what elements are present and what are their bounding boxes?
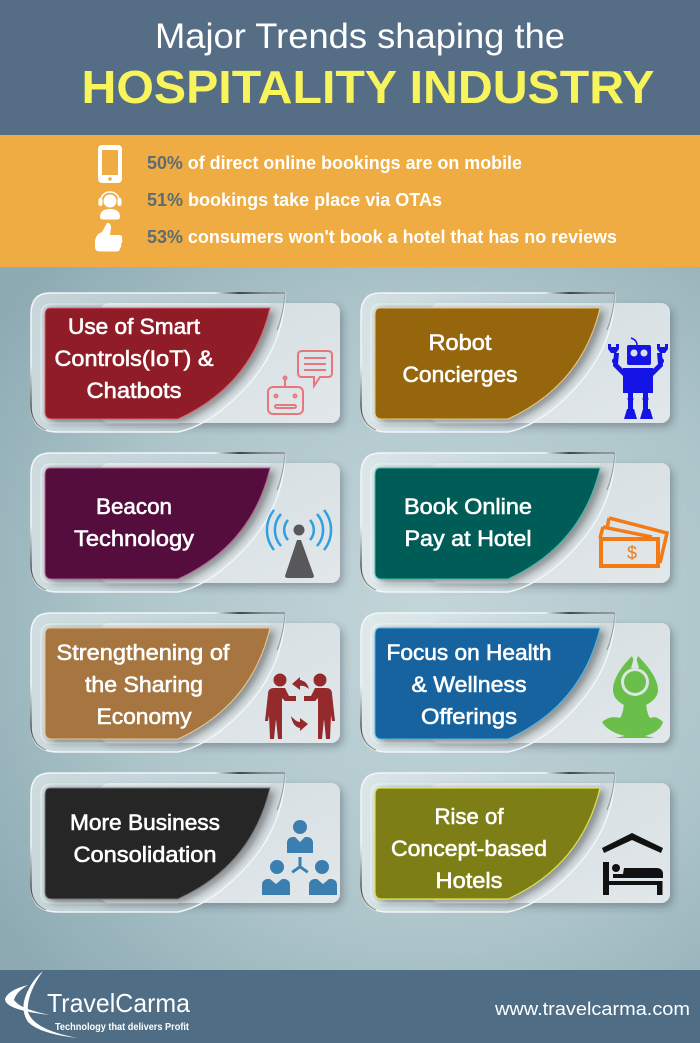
icon: sharing [265,674,335,739]
icon: robot [608,338,668,419]
label: Strengthening of [56,640,230,665]
card: smart controls [31,293,340,432]
title line 1: Major Trends shaping the [155,17,565,56]
label [391,804,547,893]
icon: thumbs up [95,223,122,252]
label [404,494,532,551]
label: Rise of [434,804,504,829]
card: business consolidation [31,773,340,912]
icon: yoga [602,654,663,738]
card: book online [361,453,670,592]
icon: beacon [267,510,331,578]
label [70,810,220,867]
icon: chatbot [268,351,332,414]
label: Offerings [421,704,517,729]
icon: cash: $ [627,543,637,563]
label [74,494,194,551]
label: Beacon [96,494,172,519]
label: & Wellness [412,672,526,697]
card: robot concierges [361,293,670,432]
icon: headset agent [98,192,122,220]
website: www.travelcarma.com [494,999,690,1019]
card: concept hotels [361,773,670,912]
label [54,314,214,403]
label: Economy [96,704,192,729]
label: Robot [428,330,492,355]
label: Consolidation [74,842,216,867]
label: Book Online [404,494,532,519]
icon: mobile phone [98,145,122,183]
label: Use of Smart [68,314,200,339]
logo: wordmark: TravelCarma [47,988,191,1018]
label: Concierges [402,362,518,387]
title line 2: HOSPITALITY INDUSTRY [82,61,654,113]
card: sharing economy [31,613,340,752]
page background [0,267,700,970]
footer band [0,970,700,1043]
label: Controls(IoT) & [54,346,214,371]
label [402,330,518,387]
stat 3: 53% consumers won't book a hotel that has no reviews [147,227,617,247]
label: the Sharing [85,672,203,697]
icon: team [262,820,337,895]
label: Focus on Health [386,640,552,665]
label: Concept-based [391,836,547,861]
logo: tagline: Technology that delivers Profit [55,1022,190,1033]
label: Technology [74,526,194,551]
logo: swoosh [5,971,78,1038]
label: Pay at Hotel [404,526,532,551]
header band [0,0,700,135]
card: health and wellness [361,613,670,752]
icon: cash [600,518,667,566]
card: beacon technology [31,453,340,592]
label: More Business [70,810,220,835]
icon: hotel bed [602,833,663,895]
stats band [0,135,700,267]
label: Chatbots [86,378,182,403]
label: Hotels [436,868,502,893]
label [386,640,552,729]
stat 1: 50% of direct online bookings are on mobile [147,153,522,173]
stat 2: 51% bookings take place via OTAs [147,190,442,210]
label [56,640,230,729]
